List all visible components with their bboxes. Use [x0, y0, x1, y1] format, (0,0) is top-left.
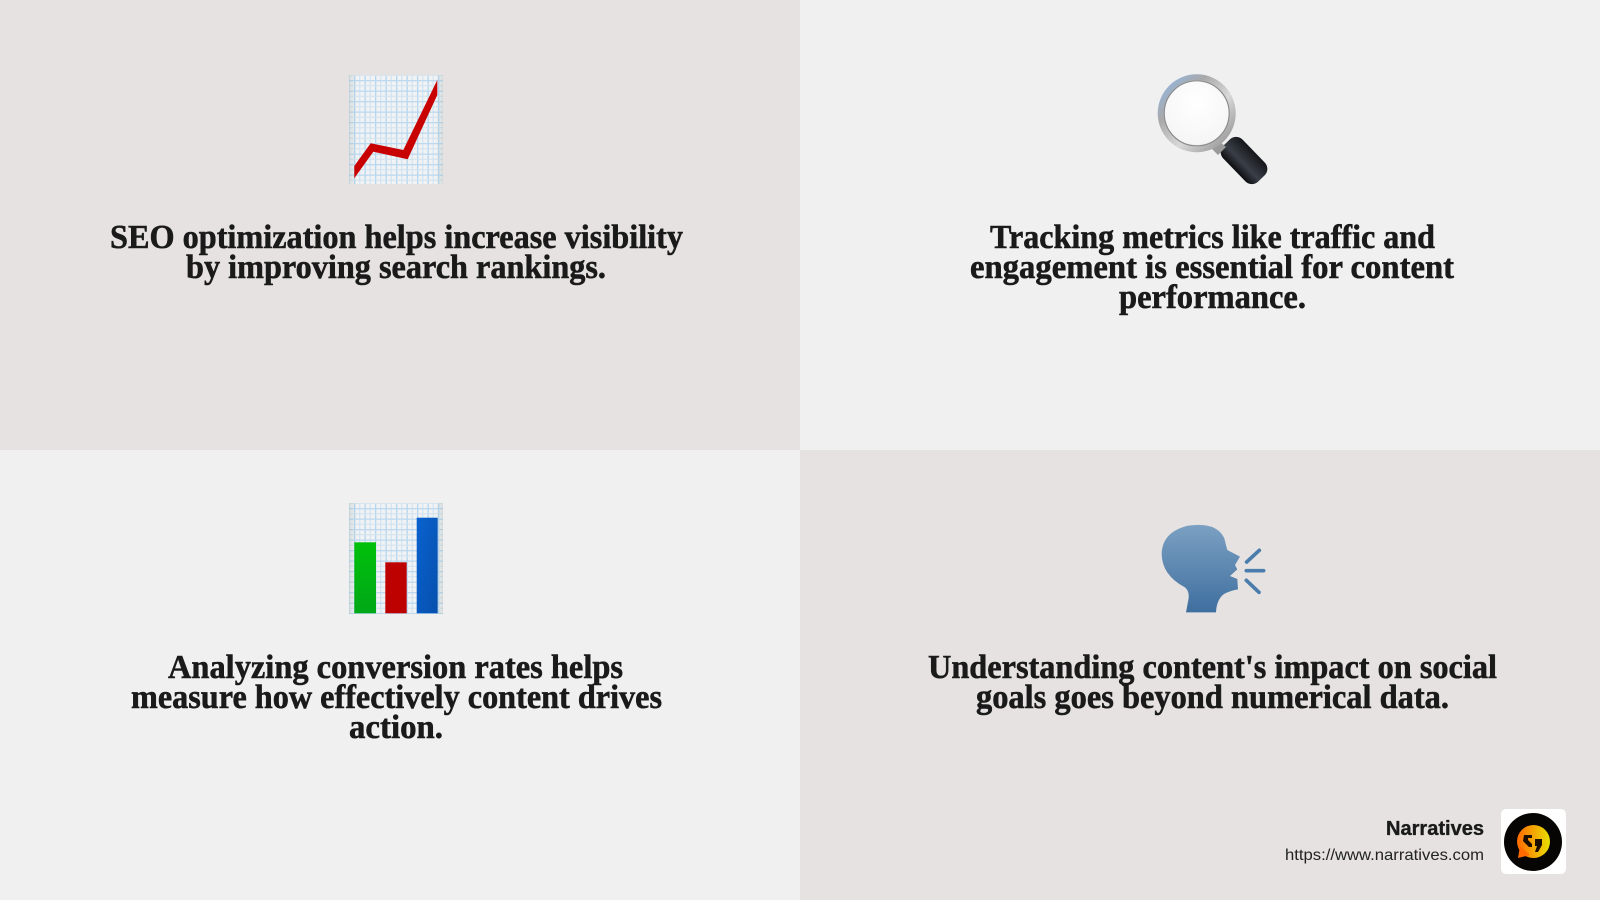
text: tracking metrics statement: engagement is essential for content	[970, 249, 1455, 286]
text: conversion rates statement: measure how effectively content drives	[131, 679, 662, 716]
icon: speaking head	[1162, 525, 1264, 612]
panel: social goals	[800, 450, 1600, 900]
text: conversion rates statement: action.	[349, 709, 443, 746]
brand url: https://www.narratives.com	[1285, 847, 1484, 864]
panel: conversion rates	[0, 450, 800, 900]
icon: Narratives logo	[1501, 809, 1566, 874]
text: SEO optimization statement: by improving search rankings.	[186, 249, 606, 286]
text: social goals statement: goals goes beyond numerical data.	[976, 679, 1449, 716]
text: conversion rates statement: Analyzing conversion rates helps	[168, 649, 623, 686]
panel: tracking metrics	[800, 0, 1600, 450]
text: tracking metrics statement: performance.	[1119, 279, 1306, 316]
icon: rising line chart	[349, 75, 443, 184]
icon: magnifying glass	[1161, 77, 1271, 188]
text: tracking metrics statement: Tracking metrics like traffic and	[990, 219, 1435, 256]
panel: SEO optimization	[0, 0, 800, 450]
text: SEO optimization statement: SEO optimization helps increase visibility	[110, 219, 683, 256]
text: social goals statement: Understanding content's impact on social	[928, 649, 1497, 686]
brand name: Narratives	[1386, 818, 1484, 840]
icon: bar chart	[349, 503, 443, 614]
